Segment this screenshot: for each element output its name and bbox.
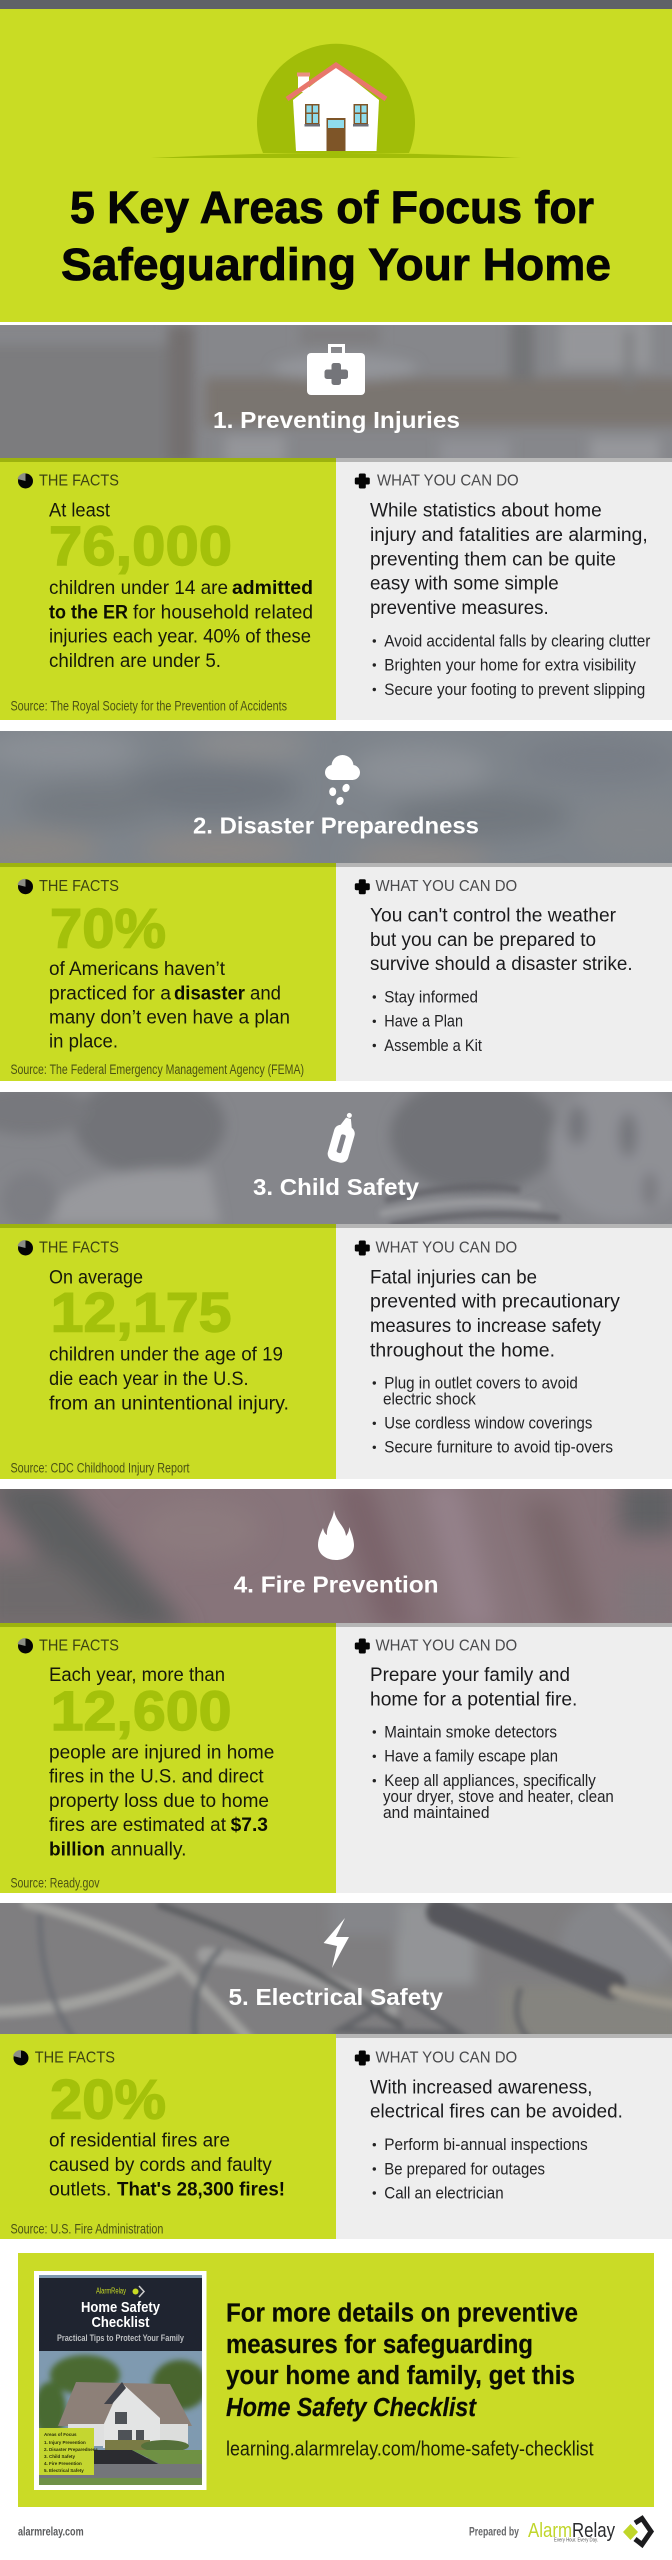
list: tips: Perform bi-annual inspections <box>384 2135 588 2154</box>
text: advice: While statistics about home <box>370 500 602 522</box>
cover inset list: 2. Disaster Preparedness <box>44 2447 98 2452</box>
text: fact body <box>49 958 290 1053</box>
cover inset list: 1. Injury Prevention <box>44 2440 86 2445</box>
photo background: children <box>0 1092 672 1224</box>
list: tips <box>373 1722 614 1822</box>
text: advice: easy with some simple <box>370 573 559 595</box>
footer website: alarmrelay.com <box>18 2525 84 2539</box>
icon: cross <box>355 879 370 894</box>
list: tips: Stay informed <box>384 987 478 1006</box>
text: advice: throughout the home. <box>370 1339 555 1361</box>
logo wordmark <box>528 2520 615 2544</box>
text: fact body: many don’t even have a plan <box>49 1007 290 1029</box>
list: tips <box>373 987 482 1055</box>
section 1 header: Preventing Injuries <box>0 325 672 458</box>
label: THE FACTS <box>35 2050 115 2067</box>
text: fact body: children under the age of 19 <box>49 1344 283 1366</box>
callout: checklist promotion <box>18 2253 654 2507</box>
icon: cross <box>355 2050 370 2066</box>
callout heading: Home Safety Checklist <box>226 2394 477 2422</box>
text: advice: preventing them can be quite <box>370 548 616 570</box>
callout heading: For more details on preventive <box>226 2300 578 2328</box>
cover title <box>81 2299 161 2331</box>
logo wordmark: Relay <box>572 2520 615 2542</box>
text: advice <box>370 904 633 975</box>
big number: 20% <box>50 2067 166 2130</box>
photo background: cords and plug <box>0 1895 672 2040</box>
section title: 5. Electrical Safety <box>228 1984 443 2010</box>
text: advice <box>370 1266 620 1361</box>
cover photo: house <box>34 2355 208 2485</box>
list: tips <box>373 1373 613 1457</box>
text: fact body: practiced for a <box>49 982 171 1004</box>
text: fact body: from an unintentional injury. <box>49 1392 289 1414</box>
photo background: storm clouds <box>0 731 672 870</box>
text: fact body: outlets. <box>49 2178 111 2200</box>
text: fact body: That's 28,300 fires! <box>117 2178 285 2200</box>
footer credit and logo: Prepared by <box>469 2525 519 2539</box>
text: fact body: of Americans haven’t <box>49 958 226 980</box>
list: tips <box>373 2135 588 2202</box>
list: tips: Maintain smoke detectors <box>384 1722 557 1741</box>
logo wordmark: Alarm <box>528 2520 572 2542</box>
icon: cross <box>355 1240 370 1256</box>
list: tips: Secure your footing to prevent slipping <box>384 680 645 699</box>
text: advice: preventive measures. <box>370 597 549 619</box>
text: advice: Fatal injuries can be <box>370 1266 537 1288</box>
section 5 header: Electrical Safety <box>0 1895 672 2040</box>
icon: pie <box>18 1240 33 1256</box>
text: advice: prevented with precautionary <box>370 1291 620 1313</box>
book cover: Home Safety Checklist <box>34 2271 208 2490</box>
list: tips: Call an electrician <box>384 2183 504 2202</box>
panel: what you can do 1 <box>336 458 672 720</box>
list: tips <box>373 631 651 699</box>
text: fact body: property loss due to home <box>49 1790 269 1812</box>
cover inset list: 5. Electrical Safety <box>44 2468 84 2473</box>
callout heading: measures for safeguarding <box>226 2331 533 2359</box>
icon: flame <box>318 1510 354 1560</box>
panel: facts 4 <box>0 1623 336 1893</box>
panel: what you can do 2 <box>336 863 672 1081</box>
list: tips: Avoid accidental falls by clearing clutter <box>384 631 651 650</box>
section title: 3. Child Safety <box>253 1174 419 1200</box>
text: advice: measures to increase safety <box>370 1315 601 1337</box>
text: fact body: die each year in the U.S. <box>49 1368 249 1390</box>
label: THE FACTS <box>39 1239 119 1256</box>
cover title: Home Safety <box>81 2299 161 2316</box>
list: tips: Plug in outlet covers to avoid <box>384 1373 578 1392</box>
text: fact body: annually. <box>111 1838 186 1860</box>
list: tips: electric shock <box>383 1389 476 1408</box>
list: tips: Assemble a Kit <box>384 1036 482 1055</box>
icon: pie <box>18 1638 33 1654</box>
text: fact body: fires are estimated at <box>49 1814 227 1836</box>
list: tips: your dryer, stove and heater, clean <box>383 1787 614 1806</box>
label: WHAT YOU CAN DO <box>376 1637 517 1654</box>
source: Source: CDC Childhood Injury Report <box>10 1460 190 1475</box>
title: 5 Key Areas of Focus for <box>70 182 594 233</box>
icon: pie <box>18 473 33 488</box>
text: advice: survive should a disaster strike. <box>370 953 633 975</box>
text: fact body: for household related <box>133 601 313 623</box>
top bar <box>0 0 672 9</box>
list: tips: Secure furniture to avoid tip-overs <box>384 1438 613 1457</box>
text: fact body: people are injured in home <box>49 1741 274 1763</box>
panel: what you can do 3 <box>336 1224 672 1479</box>
big number: 70% <box>50 896 166 959</box>
text: fact body: admitted <box>232 577 313 599</box>
panel: what you can do 4 <box>336 1623 672 1893</box>
text: fact body: fires in the U.S. and direct <box>49 1766 264 1788</box>
cover inset list <box>39 2428 98 2475</box>
big number: 76,000 <box>49 514 232 577</box>
source: Source: Ready.gov <box>10 1876 100 1891</box>
label: THE FACTS <box>39 1637 119 1654</box>
callout URL: learning.alarmrelay.com/home-safety-checklist <box>226 2439 594 2461</box>
text: advice: Prepare your family and <box>370 1664 570 1686</box>
logo mark <box>623 2518 651 2544</box>
icon: pie <box>18 879 33 894</box>
text: fact body: and <box>250 982 281 1004</box>
icon: rain cloud <box>325 755 360 806</box>
text: fact body: billion <box>49 1838 105 1860</box>
text: fact body <box>49 1344 289 1414</box>
cover logo: AlarmRelay <box>96 2286 126 2296</box>
label: WHAT YOU CAN DO <box>376 2050 517 2067</box>
text: advice: home for a potential fire. <box>370 1688 577 1710</box>
section 4 header: Fire Prevention <box>0 1489 672 1623</box>
text: advice: With increased awareness, <box>370 2076 592 2098</box>
footer credit and logo <box>469 2518 651 2544</box>
text: advice: electrical fires can be avoided. <box>370 2101 623 2123</box>
source: Source: The Royal Society for the Prevention of Accidents <box>10 699 287 714</box>
photo background: dining table <box>0 325 672 458</box>
text: advice: You can't control the weather <box>370 904 616 926</box>
list: tips: Have a Plan <box>384 1012 463 1031</box>
source: Source: The Federal Emergency Management Agency (FEMA) <box>10 1062 304 1077</box>
text: intro: On average <box>49 1266 143 1288</box>
title <box>61 182 611 290</box>
big number: 12,175 <box>51 1281 232 1344</box>
text: fact body: in place. <box>49 1031 118 1053</box>
label: THE FACTS <box>39 473 119 490</box>
header banner <box>0 9 672 322</box>
text: fact body <box>49 577 313 672</box>
text: advice <box>370 2076 623 2123</box>
text: fact body: caused by cords and faulty <box>49 2154 272 2176</box>
icon: cross <box>355 1638 370 1654</box>
section 3 header: Child Safety <box>0 1092 672 1224</box>
text: fact body <box>49 2130 285 2200</box>
cover inset list: Areas of Focus <box>44 2432 77 2437</box>
text: intro: At least <box>49 500 111 522</box>
text: fact body: $7.3 <box>231 1814 268 1836</box>
title: Safeguarding Your Home <box>61 239 611 290</box>
list: tips: Brighten your home for extra visibility <box>384 655 637 674</box>
text: advice: but you can be prepared to <box>370 929 596 951</box>
logo wordmark: Every Hour. Every Day. <box>554 2538 598 2544</box>
label: WHAT YOU CAN DO <box>376 1239 517 1256</box>
label: THE FACTS <box>39 878 119 895</box>
source: Source: U.S. Fire Administration <box>10 2221 163 2236</box>
icon: pie <box>13 2050 28 2066</box>
list: tips: Use cordless window coverings <box>384 1414 592 1433</box>
icon: baby bottle <box>326 1110 360 1164</box>
cover subtitle: Practical Tips to Protect Your Family <box>57 2333 185 2344</box>
list: tips: Have a family escape plan <box>384 1747 558 1766</box>
text: fact body: children under 14 are <box>49 577 228 599</box>
text: advice: injury and fatalities are alarming, <box>370 524 648 546</box>
big number: 12,600 <box>51 1679 232 1742</box>
text: fact body <box>49 1741 274 1860</box>
icon: house on hill <box>151 44 521 158</box>
panel: facts 5 <box>0 2034 336 2239</box>
callout heading <box>226 2300 578 2422</box>
callout heading: your home and family, get this <box>226 2362 575 2390</box>
icon: cross <box>355 474 370 488</box>
icon: first-aid kit <box>307 346 365 395</box>
list: tips: and maintained <box>383 1803 490 1822</box>
text: advice <box>370 1664 577 1710</box>
panel: facts 1 <box>0 458 336 720</box>
icon: lightning bolt <box>324 1918 349 1968</box>
cover title: Checklist <box>92 2314 150 2331</box>
text: fact body: disaster <box>174 982 245 1004</box>
label: WHAT YOU CAN DO <box>377 473 519 490</box>
panel: facts 3 <box>0 1224 336 1479</box>
panel: facts 2 <box>0 863 336 1081</box>
section title: 1. Preventing Injuries <box>213 407 460 433</box>
text: advice <box>370 500 648 619</box>
panel: what you can do 5 <box>336 2034 672 2239</box>
label: WHAT YOU CAN DO <box>376 878 517 895</box>
section 2 header: Disaster Preparedness <box>0 731 672 870</box>
list: tips: Be prepared for outages <box>384 2159 545 2178</box>
text: fact body: children are under 5. <box>49 650 221 672</box>
photo background: warm blur <box>0 1489 672 1623</box>
text: fact body: of residential fires are <box>49 2130 230 2152</box>
list: tips: Keep all appliances, specifically <box>384 1771 596 1790</box>
text: fact body: injuries each year. 40% of these <box>49 626 311 648</box>
text: fact body: to the ER <box>49 601 128 623</box>
text: intro: Each year, more than <box>49 1664 225 1686</box>
cover inset list: 3. Child Safety <box>44 2454 76 2459</box>
section title: 2. Disaster Preparedness <box>193 812 479 838</box>
section title: 4. Fire Prevention <box>234 1572 439 1598</box>
cover inset list: 4. Fire Prevention <box>44 2461 82 2466</box>
